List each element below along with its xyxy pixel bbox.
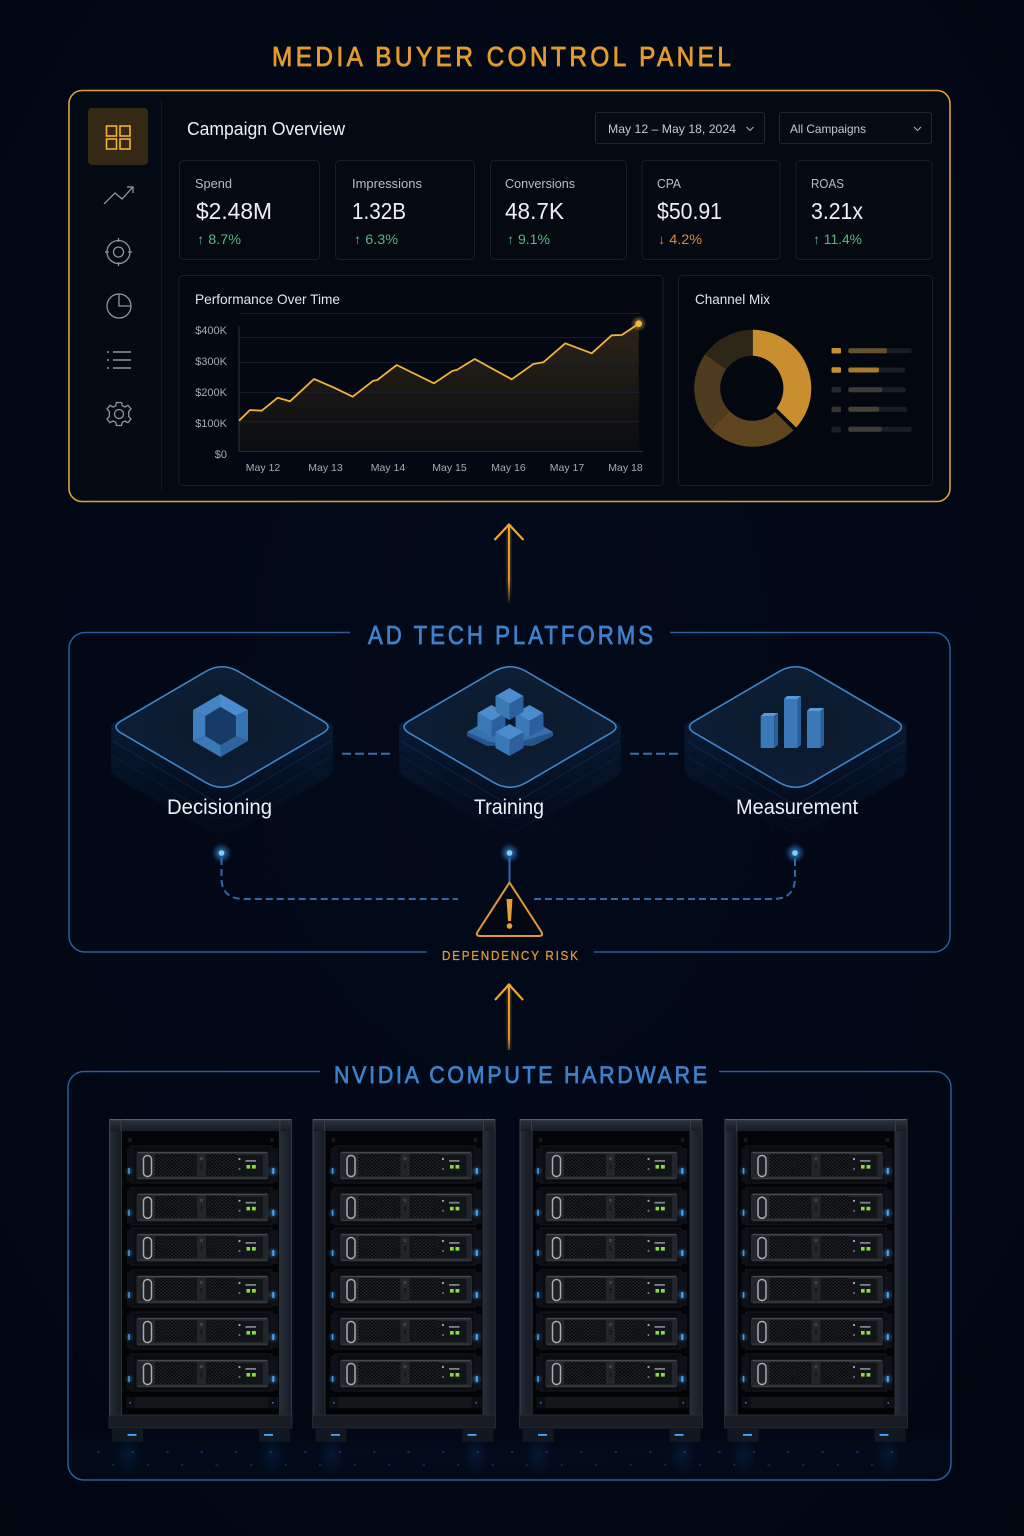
line chart: performance over time: May 17	[550, 462, 584, 474]
connector: decisioning to training	[342, 753, 390, 755]
platform: measurement	[684, 667, 906, 838]
chart: channel mix: Channel Mix	[695, 291, 770, 307]
icon: warning triangle	[477, 882, 542, 936]
platform: decisioning	[111, 667, 333, 838]
KPI card: ROAS: ROAS	[811, 177, 844, 191]
campaign dropdown	[780, 112, 932, 144]
line chart: performance over time: $400K	[195, 325, 228, 337]
icon: dashboard grid (active)	[88, 108, 148, 165]
floor lights	[97, 1452, 910, 1465]
donut chart	[694, 330, 811, 447]
KPI card: spend	[180, 160, 320, 260]
icon: list	[107, 352, 131, 368]
icon: hexagon	[193, 694, 248, 757]
line chart: performance over time	[179, 276, 663, 486]
server rack 3	[520, 1119, 702, 1477]
KPI card: CPA: CPA	[657, 177, 682, 191]
KPI card: impressions: ↑ 6.3%	[354, 232, 398, 247]
line chart: performance over time: Performance Over Time	[195, 291, 340, 307]
KPI card: conversions: Conversions	[505, 177, 575, 191]
arrow: hardware to platforms	[495, 984, 523, 1050]
arrow: platforms to control panel	[494, 524, 524, 604]
KPI card: conversions: ↑ 9.1%	[507, 232, 550, 247]
platform: measurement: Measurement	[736, 796, 858, 819]
KPI card: CPA: $50.91	[657, 198, 722, 224]
line chart: performance over time: May 14	[371, 462, 405, 474]
icon: target	[105, 238, 132, 266]
icon: cubes	[467, 688, 553, 756]
KPI card: spend: $2.48M	[196, 198, 272, 224]
KPI card: ROAS: ↑ 11.4%	[813, 232, 862, 247]
KPI card: spend: Spend	[195, 177, 232, 191]
chart: channel mix	[678, 276, 932, 486]
line chart: performance over time: May 18	[608, 462, 643, 474]
panel: NVIDIA compute hardware	[68, 1061, 951, 1480]
background dots	[95, 825, 920, 885]
line chart: performance over time: May 13	[308, 462, 343, 474]
panel: ad tech platforms	[69, 622, 950, 963]
node: training	[500, 843, 520, 863]
node: decisioning	[212, 843, 232, 863]
legend	[832, 348, 912, 433]
title: MEDIA BUYER CONTROL PANEL	[272, 40, 731, 72]
icon: gear	[107, 402, 131, 426]
line chart: performance over time: $200K	[195, 387, 228, 399]
node: measurement	[785, 843, 805, 863]
icon: bars	[761, 696, 824, 748]
server rack 1	[109, 1119, 292, 1477]
KPI card: spend: ↑ 8.7%	[197, 232, 241, 247]
line chart: performance over time: $100K	[195, 418, 228, 430]
KPI card: CPA	[642, 160, 780, 260]
line chart: performance over time: May 12	[246, 462, 280, 474]
heading: campaign overview: Campaign Overview	[187, 119, 346, 139]
icon: pie chart	[107, 294, 131, 318]
KPI card: impressions	[336, 160, 474, 260]
KPI card: ROAS: 3.21x	[811, 198, 863, 224]
KPI card: impressions: Impressions	[352, 177, 422, 191]
platform: training: Training	[474, 796, 544, 819]
campaign dropdown: All Campaigns	[790, 122, 866, 136]
platform: decisioning: Decisioning	[167, 796, 272, 819]
connector: training to measurement	[630, 753, 678, 755]
icon: trend line	[104, 187, 133, 204]
sidebar navigation	[88, 108, 148, 426]
KPI card: CPA: ↓ 4.2%	[658, 232, 702, 247]
line chart: performance over time: May 15	[432, 462, 467, 474]
server rack 2	[312, 1119, 496, 1477]
KPI card: conversions: 48.7K	[505, 198, 565, 224]
date range dropdown	[596, 112, 764, 144]
platform: training	[399, 667, 621, 838]
panel: campaign dashboard	[69, 90, 950, 502]
KPI card: ROAS	[796, 160, 932, 260]
heading: NVIDIA compute hardware: NVIDIA COMPUTE HARDWARE	[334, 1061, 707, 1088]
server rack 4	[724, 1119, 908, 1477]
KPI card: impressions: 1.32B	[352, 198, 406, 224]
dependency lines	[222, 858, 795, 899]
line chart: performance over time: $0	[215, 449, 227, 461]
line chart: performance over time: May 16	[491, 462, 526, 474]
heading: ad tech platforms: AD TECH PLATFORMS	[368, 622, 653, 650]
date range dropdown: May 12 – May 18, 2024	[608, 122, 736, 136]
KPI card: conversions	[490, 160, 626, 260]
line chart: performance over time: $300K	[195, 356, 228, 368]
label: dependency risk: DEPENDENCY RISK	[442, 948, 579, 963]
